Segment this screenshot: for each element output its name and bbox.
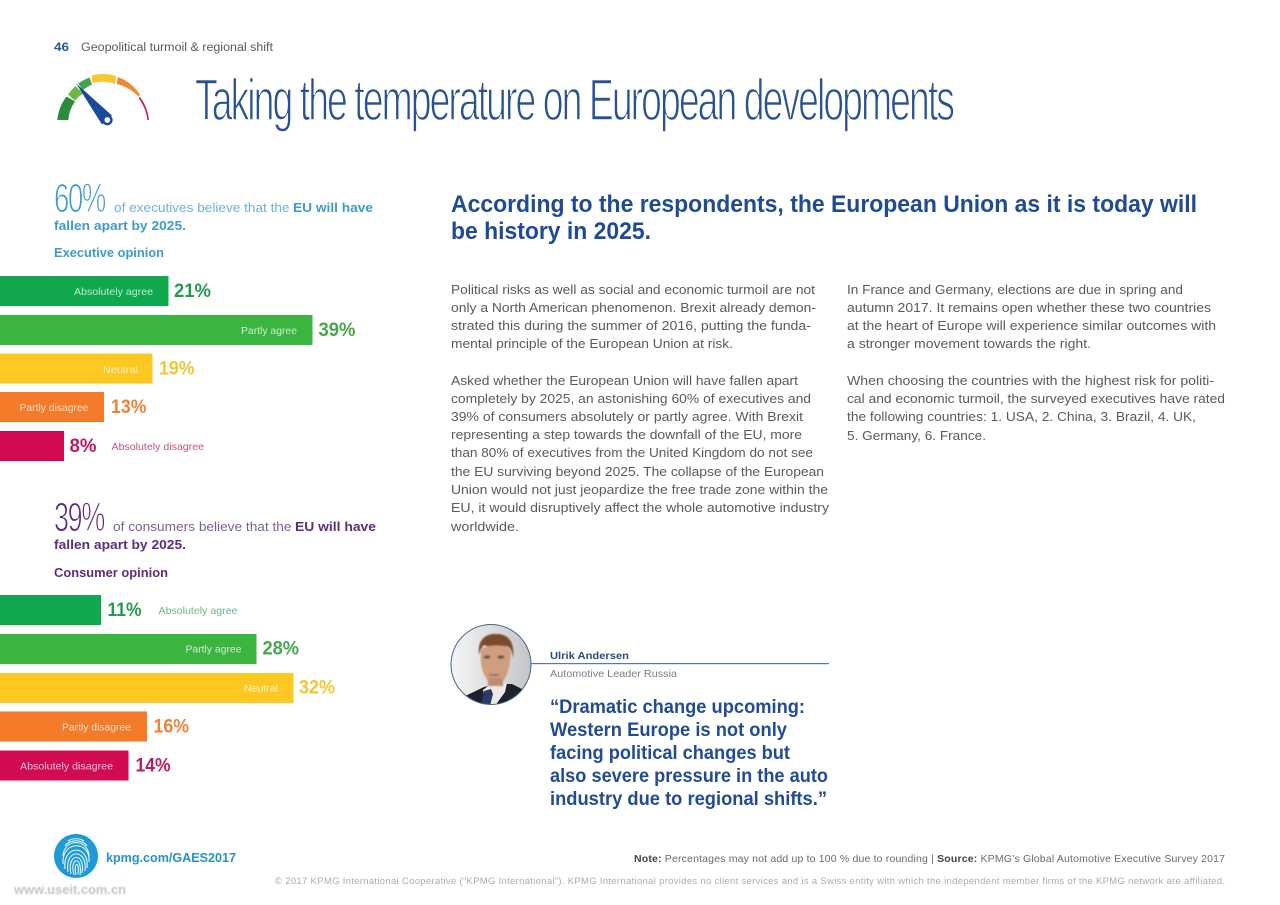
bar: partly disagree 13%: 13%: [111, 397, 147, 418]
text block: left column: the EU surviving beyond 2025. The collapse of the European: [451, 464, 824, 479]
bar: partly disagree 13%: Partly disagree: [20, 402, 89, 414]
bar: partly agree 39%: [0, 315, 356, 345]
text block: right column: [847, 282, 1225, 443]
portrait photo: [451, 624, 531, 712]
text block: right column: autumn 2017. It remains open whether these two countries: [847, 300, 1212, 315]
bar: neutral 19%: [0, 354, 195, 384]
text block: left column: completely by 2025, an astonishing 60% of executives and: [451, 391, 811, 406]
text block: left column: 39% of consumers absolutely or partly agree. With Brexit: [451, 409, 803, 424]
bar: neutral 32%: [0, 673, 335, 703]
bar: absolutely disagree 8%: Absolutely disagree: [112, 441, 204, 453]
text block: left column: representing a step towards the downfall of the EU, more: [451, 427, 802, 442]
text block: left column: strated this during the summer of 2016, putting the funda-: [451, 318, 811, 333]
speaker name and role: Ulrik Andersen: [550, 650, 629, 662]
bar: absolutely agree 21%: 21%: [174, 281, 211, 302]
text block: left column: Union would not just jeopardize the free trade zone within the: [451, 482, 828, 497]
bar: absolutely agree 21%: [0, 276, 211, 306]
text block: right column: the following countries: 1. USA, 2. China, 3. Brazil, 4. UK,: [847, 409, 1196, 424]
speaker name and role: [531, 650, 829, 680]
bar: absolutely disagree 8%: 8%: [70, 436, 97, 457]
text block: right column: When choosing the countries with the highest risk for politi-: [847, 373, 1214, 388]
text block: right column: cal and economic turmoil, the surveyed executives have rated: [847, 391, 1225, 406]
executive headline: EU will have: [293, 200, 373, 215]
bar: absolutely agree 21%: Absolutely agree: [74, 286, 153, 298]
text block: left column: Political risks as well as social and economic turmoil are not: [451, 282, 815, 297]
text block: left column: only a North American phenomenon. Brexit already demon-: [451, 300, 816, 315]
watermark: www.useit.com.cn: [13, 882, 126, 897]
bar: partly disagree 13%: [0, 392, 147, 422]
bar: absolutely disagree 14%: 14%: [136, 756, 171, 776]
bar: neutral 32%: Neutral: [244, 682, 278, 694]
text block: right column: at the heart of Europe will experience similar outcomes with: [847, 318, 1216, 333]
consumer headline: of consumers believe that the: [113, 519, 292, 534]
bar: neutral 32%: 32%: [299, 678, 335, 698]
text block: left column: EU, it would disruptively affect the whole automotive industry: [451, 500, 830, 515]
footnote: note and source: Note: Percentages may not add up to 100 % due to rounding | Source: KPMG’s Global Automotive Executive Survey 2017: [634, 853, 1225, 865]
quote text: also severe pressure in the auto: [550, 765, 828, 787]
executive headline: of executives believe that the: [114, 200, 290, 215]
quote text: [550, 696, 828, 810]
icon: gauge: [57, 74, 149, 124]
bar: partly agree 39%: Partly agree: [241, 325, 297, 337]
panel: quote: [451, 624, 829, 810]
bar: partly agree 28%: 28%: [262, 638, 299, 660]
page header: 46: [54, 42, 69, 54]
executive headline: 60%: [54, 175, 105, 221]
bar: partly disagree 16%: Partly disagree: [62, 722, 131, 734]
bar: partly disagree 16%: [0, 712, 189, 742]
consumer headline: fallen apart by 2025.: [54, 537, 186, 552]
bar: partly disagree 16%: 16%: [154, 716, 189, 738]
text block: right column: In France and Germany, elections are due in spring and: [847, 282, 1183, 297]
bar: partly agree 28%: [0, 634, 299, 664]
bar: absolutely agree 11%: 11%: [108, 600, 142, 621]
icon: fingerprint: [54, 834, 98, 878]
bar: absolutely disagree 8%: [0, 431, 204, 461]
panel: consumer opinion: [0, 494, 376, 780]
consumer headline: [54, 494, 376, 580]
panel: executive opinion: [0, 175, 373, 461]
text block: left column: Asked whether the European Union will have fallen apart: [451, 373, 798, 388]
link: kpmg.com/GAES2017: [106, 851, 236, 865]
bar: partly agree 28%: Partly agree: [186, 644, 242, 656]
main heading: According to the respondents, the European Union as it is today will: [451, 191, 1197, 218]
bar: neutral 19%: Neutral: [103, 364, 138, 376]
quote text: Western Europe is not only: [550, 719, 787, 741]
bar: partly agree 39%: 39%: [318, 320, 356, 341]
consumer headline: 39%: [54, 494, 104, 540]
bar: absolutely agree 11%: [0, 595, 238, 625]
bar: neutral 19%: 19%: [159, 358, 195, 380]
text block: right column: 5. Germany, 6. France.: [847, 428, 986, 443]
text block: right column: a stronger movement towards the right.: [847, 336, 1091, 351]
copyright: © 2017 KPMG International Cooperative (“KPMG International”). KPMG International provides no client services and is a Swiss entity with which the independent member firms of the KPMG network are affiliated.: [275, 876, 1225, 887]
page header: Geopolitical turmoil & regional shift: [81, 42, 274, 54]
bar: absolutely agree 11%: Absolutely agree: [158, 605, 238, 617]
text block: left column: mental principle of the European Union at risk.: [451, 336, 733, 351]
quote text: “Dramatic change upcoming:: [550, 696, 805, 718]
main heading: [451, 191, 1197, 245]
bar: absolutely disagree 14%: [0, 750, 171, 780]
speaker name and role: Automotive Leader Russia: [550, 668, 677, 680]
consumer headline: EU will have: [295, 519, 376, 534]
consumer headline: Consumer opinion: [54, 566, 168, 580]
quote text: facing political changes but: [550, 742, 790, 764]
executive headline: [54, 175, 373, 260]
quote text: industry due to regional shifts.”: [550, 788, 827, 810]
text block: left column: [450, 282, 830, 534]
text block: left column: worldwide.: [450, 519, 519, 534]
executive headline: fallen apart by 2025.: [54, 218, 186, 233]
main heading: be history in 2025.: [451, 218, 651, 245]
bar: absolutely disagree 14%: Absolutely disagree: [20, 760, 113, 772]
text block: left column: than 80% of executives from the United Kingdom do not see: [451, 445, 813, 460]
executive headline: Executive opinion: [54, 246, 164, 260]
